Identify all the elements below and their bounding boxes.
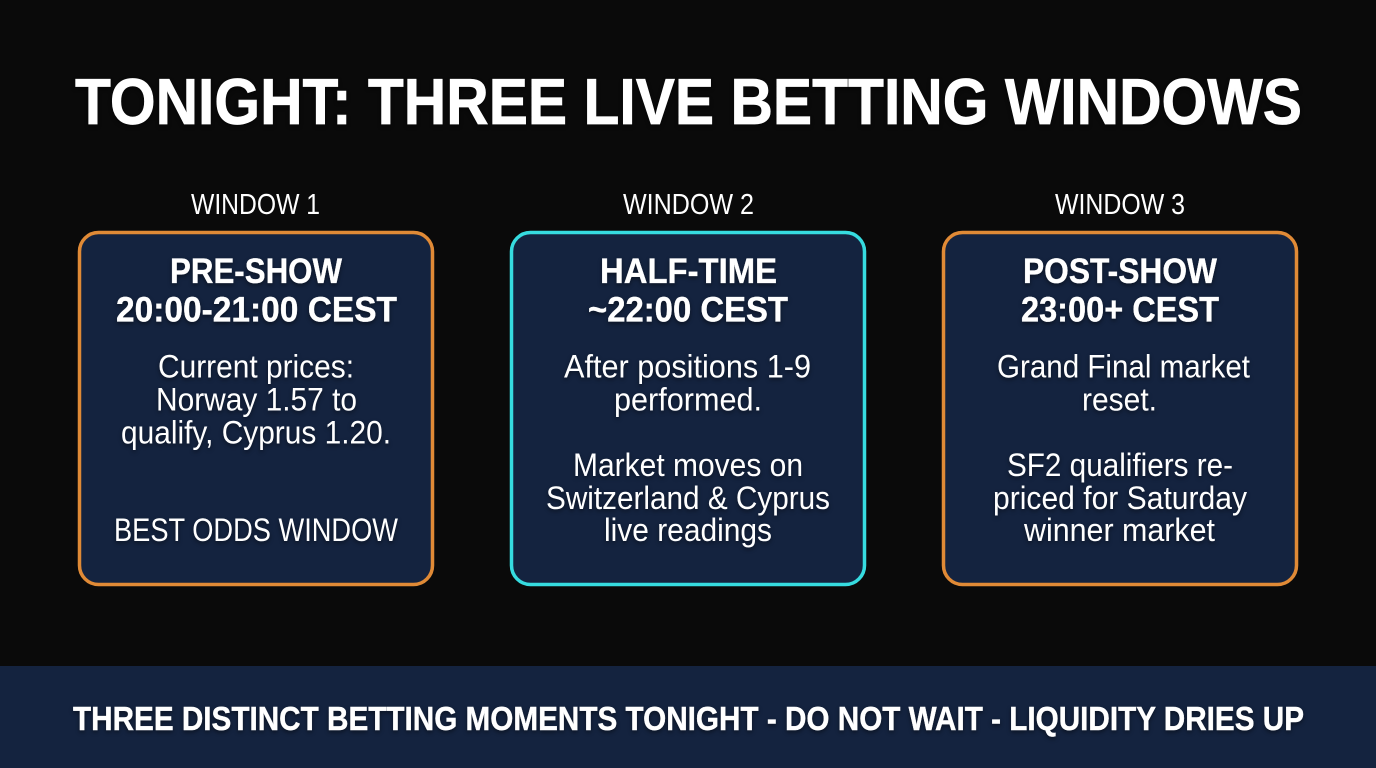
panel background bbox=[80, 232, 432, 584]
text: current prices: Norway 1.57 to bbox=[156, 382, 357, 418]
heading: pre-show: PRE-SHOW bbox=[170, 252, 342, 291]
text: sf2 qualifiers: winner market bbox=[1023, 512, 1215, 548]
column 2: window 2 bbox=[512, 189, 864, 584]
heading: pre-show bbox=[116, 252, 397, 330]
text: current prices: Current prices: bbox=[158, 348, 354, 384]
heading: half-time: HALF-TIME bbox=[600, 252, 777, 291]
text: market moves: Switzerland & Cyprus bbox=[546, 480, 830, 516]
panel: post-show bbox=[944, 232, 1296, 584]
text: current prices bbox=[121, 348, 391, 450]
window 1 label: WINDOW 1 bbox=[191, 189, 320, 221]
panel: pre-show bbox=[80, 232, 432, 584]
text: grand final: reset. bbox=[1082, 382, 1157, 418]
column 1: window 1 bbox=[80, 189, 432, 584]
text: grand final: Grand Final market bbox=[997, 348, 1250, 384]
column 3: window 3 bbox=[944, 189, 1296, 584]
heading: post-show: 23:00+ CEST bbox=[1021, 290, 1219, 330]
text: market moves bbox=[546, 447, 830, 548]
heading: post-show bbox=[1021, 252, 1219, 330]
panel: half-time bbox=[512, 232, 864, 584]
text: market moves: Market moves on bbox=[573, 447, 803, 483]
footer background bbox=[0, 666, 1376, 768]
heading: pre-show: 20:00-21:00 CEST bbox=[116, 290, 397, 330]
heading: half-time bbox=[588, 252, 788, 330]
text: after positions: After positions 1-9 bbox=[564, 348, 811, 384]
panel background bbox=[512, 232, 864, 584]
text: after positions: performed. bbox=[614, 382, 762, 418]
text: grand final bbox=[997, 348, 1250, 418]
text: sf2 qualifiers bbox=[993, 447, 1247, 548]
text: sf2 qualifiers: priced for Saturday bbox=[993, 480, 1247, 516]
text: after positions bbox=[564, 348, 811, 418]
footer banner bbox=[0, 666, 1376, 768]
text: sf2 qualifiers: SF2 qualifiers re- bbox=[1007, 447, 1233, 483]
heading: post-show: POST-SHOW bbox=[1023, 252, 1217, 291]
window 2 label: WINDOW 2 bbox=[623, 189, 754, 221]
text: best odds window: BEST ODDS WINDOW bbox=[114, 512, 399, 548]
text: current prices: qualify, Cyprus 1.20. bbox=[121, 414, 391, 450]
heading: half-time: ~22:00 CEST bbox=[588, 290, 788, 330]
text: market moves: live readings bbox=[604, 512, 772, 548]
panel background bbox=[944, 232, 1296, 584]
window 3 label: WINDOW 3 bbox=[1055, 189, 1185, 221]
